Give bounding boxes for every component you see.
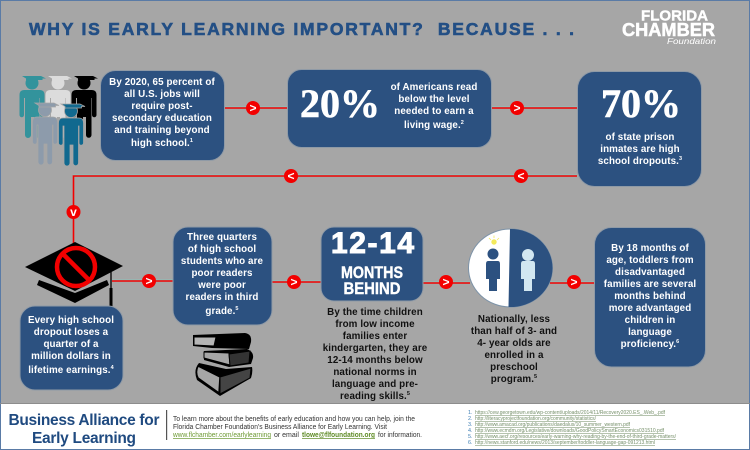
arrow nodes: > <box>290 275 298 289</box>
icon: stack of books <box>193 333 253 396</box>
arrow nodes: > <box>145 274 153 288</box>
logo: Florida Chamber Foundation: Foundation <box>667 36 716 46</box>
panel: 70% of inmates: inmates are high <box>600 144 680 155</box>
connector lines <box>74 107 594 283</box>
arrow nodes: v <box>70 205 77 219</box>
panel: 2020 jobs <box>100 70 224 160</box>
panel: 2020 jobs: all U.S. jobs will <box>124 89 200 100</box>
panel: 18 months toddlers: proficiency. <box>621 339 676 350</box>
footer call to action: for information. <box>378 432 422 439</box>
text block: preschool enrollment: 5 <box>534 374 537 380</box>
footer references: 2. <box>468 416 472 422</box>
panel: 20% of Americans: 20% <box>300 81 380 126</box>
panel: 18 months toddlers: more advantaged <box>609 303 691 314</box>
footer call to action: Florida Chamber Foundation's Business Alliance for Early Learning. Visit <box>173 424 387 431</box>
panel: poor readers: were poor <box>197 280 246 291</box>
footer heading <box>8 412 160 447</box>
text block: low income families: from low income <box>335 319 415 330</box>
panel: 18 months toddlers: months behind <box>614 291 686 302</box>
panel: 18 months toddlers: families are several <box>604 279 696 290</box>
footer panel <box>0 403 750 450</box>
arrow nodes <box>66 101 581 289</box>
logo: Florida Chamber Foundation <box>622 8 716 46</box>
panel: dropout earnings: 4 <box>111 365 115 371</box>
panel: dropout earnings: lifetime earnings. <box>28 365 111 376</box>
icon: group of graduates <box>20 76 98 166</box>
panel: 20% of Americans: living wage. <box>404 120 461 131</box>
panel: 70% of inmates: school dropouts. <box>598 156 679 167</box>
footer references: http://www.ecmdm.org/Legislative/downloads/GoodPolicySmartEconomics031510.pdf <box>475 428 664 434</box>
title: WHY IS EARLY LEARNING IMPORTANT? BECAUSE . . . <box>29 19 574 39</box>
panel: 2020 jobs: By 2020, 65 percent of <box>109 77 215 88</box>
panel: poor readers: grade. <box>205 306 235 317</box>
text block: low income families: families enter <box>343 331 407 342</box>
footer references: 1. <box>468 410 472 416</box>
panel: poor readers <box>173 227 272 325</box>
panel: 18 months toddlers: children in <box>625 315 675 326</box>
panel: 2020 jobs: require post- <box>131 101 193 112</box>
graduate: blue <box>58 104 85 166</box>
panel: poor readers: students who are <box>181 256 264 267</box>
panel: 20% of Americans: of Americans read <box>391 82 477 93</box>
footer references: http://www.aecf.org/resources/early-warning-why-reading-by-the-end-of-third-grade-matters/ <box>475 434 676 440</box>
arrow nodes: > <box>513 101 521 115</box>
panel: poor readers: Three quarters <box>187 232 257 243</box>
footer call to action: or email <box>274 432 299 439</box>
footer references: 5. <box>468 434 472 440</box>
arrow nodes: < <box>287 169 295 183</box>
text block: preschool enrollment: Nationally, less <box>478 314 551 325</box>
panel: 18 months toddlers: language <box>628 327 672 338</box>
footer references: 3. <box>468 422 472 428</box>
panel: 18 months toddlers: disadvantaged <box>615 267 685 278</box>
graduate: teal <box>20 76 46 138</box>
icon: graduation cap with prohibition sign <box>25 242 123 307</box>
panel: 12-14 months behind <box>321 227 423 301</box>
panel: 20% of Americans <box>288 70 492 148</box>
arrow nodes: > <box>249 101 257 115</box>
arrow nodes: > <box>442 275 450 289</box>
footer call to action <box>172 416 422 439</box>
panel: 12-14 months behind: MONTHS <box>341 264 403 282</box>
panel: poor readers: poor readers <box>191 268 253 279</box>
text block: preschool enrollment <box>471 314 557 385</box>
panel: 2020 jobs: and training beyond <box>114 125 210 136</box>
panel: 70% of inmates <box>578 72 702 186</box>
text block: low income families: language and pre- <box>332 379 418 390</box>
panel: 18 months toddlers: age, toddlers from <box>606 255 694 266</box>
text block: low income families: kindergarten, they are <box>323 343 428 354</box>
footer call to action: www.flchamber.com/earlylearning <box>172 432 271 439</box>
panel: dropout earnings: Every high school <box>28 315 114 326</box>
footer heading: Business Alliance for <box>8 412 160 429</box>
panel: poor readers: readers in third <box>186 292 258 303</box>
panel: dropout earnings: dropout loses a <box>34 327 109 338</box>
graduate: black <box>72 76 98 138</box>
footer references: 4. <box>468 428 472 434</box>
panel: 20% of Americans: 2 <box>461 120 464 126</box>
panel: dropout earnings <box>20 306 123 390</box>
text block: low income families: By the time children <box>327 307 423 318</box>
text block: low income families: reading skills. <box>340 391 407 402</box>
panel: dropout earnings: quarter of a <box>43 339 99 350</box>
text block: low income families: 12-14 months below <box>327 355 423 366</box>
panel: poor readers: 5 <box>235 306 239 312</box>
footer references: 6. <box>468 440 472 446</box>
logo: Florida Chamber Foundation: FLORIDA <box>641 8 708 24</box>
text block: preschool enrollment: than half of 3- and <box>471 326 557 337</box>
arrow nodes: > <box>570 275 578 289</box>
footer references <box>468 410 676 446</box>
footer heading: Early Learning <box>32 430 136 447</box>
footer references: http://www.amacad.org/publications/daedalus/10_summer_western.pdf <box>475 422 630 428</box>
panel: 2020 jobs: 1 <box>190 138 193 144</box>
panel: 20% of Americans: needed to earn a <box>394 106 474 117</box>
footer references: http://literacyprojectfoundation.org/community/statistics/ <box>475 416 596 422</box>
panel: 18 months toddlers: By 18 months of <box>611 243 689 254</box>
panel: 12-14 months behind: BEHIND <box>344 280 401 298</box>
logo: Florida Chamber Foundation: CHAMBER <box>622 20 715 40</box>
panel: 18 months toddlers <box>594 228 706 367</box>
graduate: slate <box>32 103 59 165</box>
footer references: https://cew.georgetown.edu/wp-content/uploads/2014/11/Recovery2020.ES_.Web_.pdf <box>475 410 665 416</box>
text block: preschool enrollment: 4- year olds are <box>477 338 551 349</box>
panel: 12-14 months behind: 12-14 <box>331 227 414 260</box>
footer call to action: tlowe@flfoundation.org <box>302 432 375 439</box>
text block: low income families: 5 <box>407 391 410 397</box>
graduate: light grey <box>46 76 72 138</box>
panel: 20% of Americans: below the level <box>398 94 470 105</box>
panel: dropout earnings: million dollars in <box>31 351 111 362</box>
footer references: http://news.stanford.edu/news/2013/september/toddler-language-gap-091213.html <box>475 440 655 446</box>
text block: preschool enrollment: program. <box>491 374 534 385</box>
panel: 2020 jobs: high school. <box>131 138 190 149</box>
arrow nodes: < <box>517 169 525 183</box>
text block: low income families: national norms in <box>333 367 417 378</box>
panel: 2020 jobs: secondary education <box>112 113 212 124</box>
panel: 70% of inmates: of state prison <box>606 132 674 143</box>
icon: children split circle <box>468 229 552 307</box>
text block: preschool enrollment: enrolled in a <box>484 350 544 361</box>
panel: 18 months toddlers: 6 <box>676 339 679 345</box>
panel: poor readers: of high school <box>188 244 256 255</box>
panel: 70% of inmates: 70% <box>601 81 681 126</box>
footer call to action: To learn more about the benefits of early education and how you can help, join the <box>173 416 415 423</box>
text block: preschool enrollment: preschool <box>490 362 538 373</box>
text block: low income families <box>323 307 428 402</box>
panel: 70% of inmates: 3 <box>679 156 682 162</box>
